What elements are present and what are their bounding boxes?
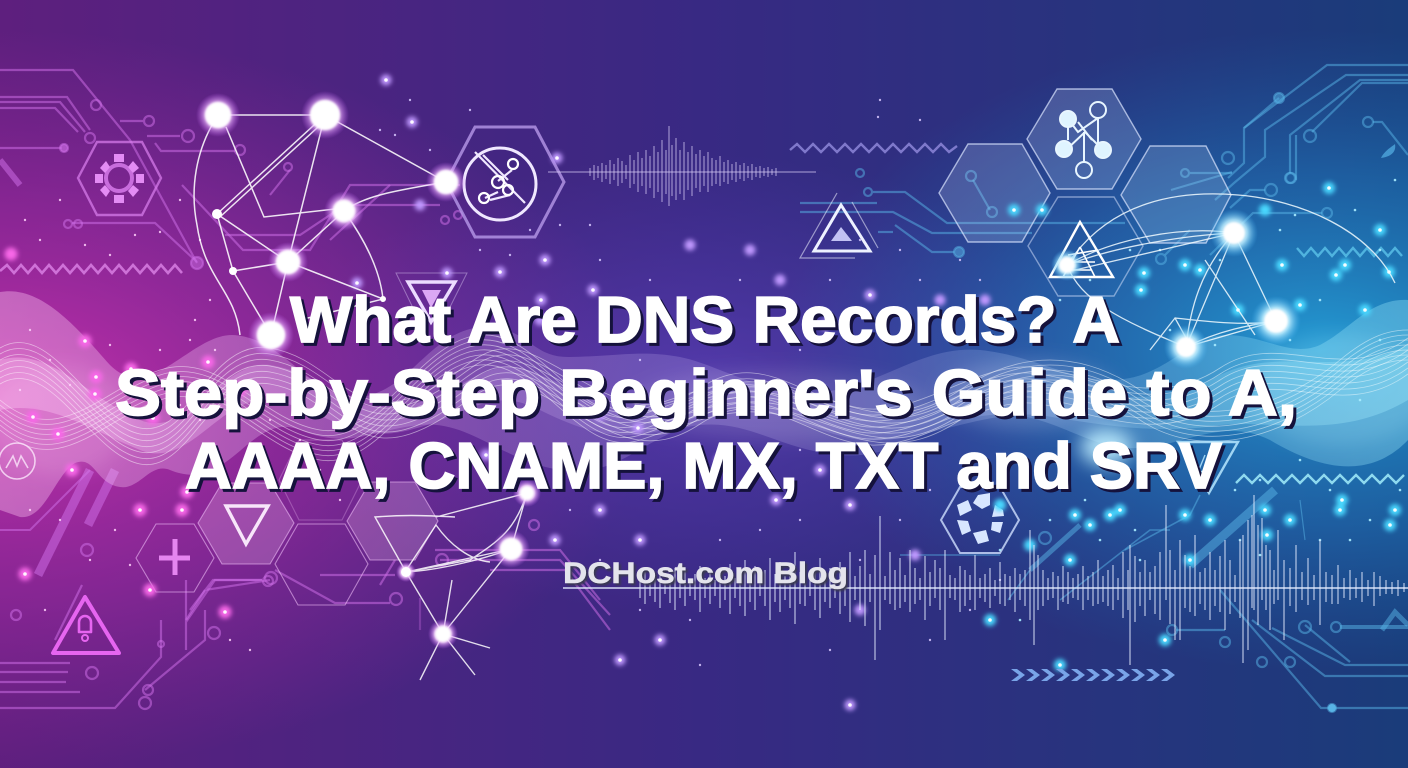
chevron arrows [1011, 669, 1175, 681]
title [115, 283, 1297, 502]
icon: warning triangle [53, 597, 119, 653]
title: AAAA, CNAME, MX, TXT and SRV [185, 429, 1222, 502]
circuit traces left [0, 70, 610, 709]
circuit traces right [800, 65, 1408, 712]
node network top left [194, 91, 466, 358]
icon: network graph in hexagon [1056, 102, 1111, 178]
icon: triangle in lower hexagon [1050, 222, 1113, 277]
icon: badge on wave left [0, 443, 35, 479]
bottom waveform [563, 495, 1408, 665]
leaf decor right [1381, 144, 1395, 158]
title: Step-by-Step Beginner's Guide to A, [115, 356, 1297, 429]
hexagon cluster top right [939, 89, 1231, 296]
icon: inverted triangle right [1178, 442, 1238, 493]
node network right [1051, 194, 1395, 369]
zigzag left [0, 265, 182, 273]
zigzag top centre [790, 144, 957, 152]
node network bottom [375, 479, 541, 680]
icon: inverted triangle behind title [396, 273, 467, 345]
subtitle: DCHost.com Blog [563, 557, 848, 590]
top waveform [548, 126, 816, 206]
hexagon blocked network icon [446, 127, 564, 237]
title: What Are DNS Records? A [290, 283, 1120, 356]
icon: recycle hexagon [941, 487, 1019, 553]
wave band [0, 291, 1408, 517]
icon: inverted triangle in hexagon [226, 506, 268, 544]
icon: triangle left of hexagons [800, 193, 878, 258]
zigzag right [1236, 248, 1404, 483]
icon: plus [159, 539, 190, 575]
hexagon gear icon [78, 142, 161, 215]
hexagon group lower left [136, 440, 438, 605]
